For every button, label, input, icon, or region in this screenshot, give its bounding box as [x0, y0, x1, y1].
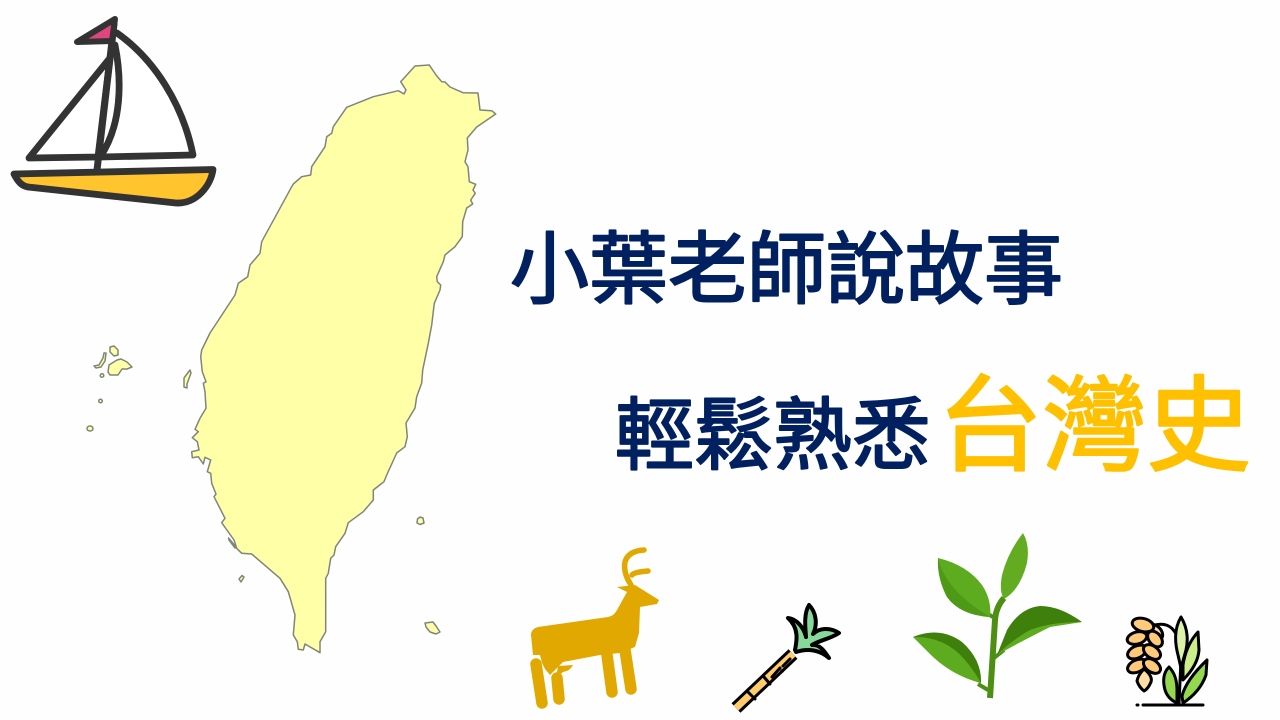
- plant leaves: [1176, 617, 1187, 668]
- deer tuft: [556, 665, 573, 678]
- subtitle: gold emphasis: 台灣史: [938, 341, 1251, 492]
- deer body: [531, 585, 659, 675]
- tea left leaf: [913, 633, 981, 683]
- sugarcane leaves: [788, 605, 839, 658]
- icon: sugarcane: [736, 605, 839, 708]
- deer antlers: [625, 550, 648, 585]
- tea side stems: [978, 614, 1004, 690]
- sugarcane stalk joints: [747, 668, 780, 699]
- map: Orchid Island: [425, 622, 440, 634]
- title: second line: [615, 341, 1251, 492]
- plant stem: [1155, 624, 1181, 703]
- map: Taiwan and outlying islands: [87, 65, 496, 653]
- map: Xiaoliuqiu and small islets: [228, 538, 244, 582]
- map: Penghu islands: [87, 346, 132, 431]
- map: main island: [192, 65, 496, 653]
- sugarcane stalk: [736, 654, 793, 708]
- icon: tea sprig: [913, 533, 1082, 698]
- icon: sailboat: [14, 19, 213, 203]
- tea right leaf: [997, 606, 1082, 655]
- map: Green Island: [417, 517, 424, 524]
- sailboat flag: [77, 19, 115, 42]
- deer legs: [536, 650, 631, 703]
- tea upper-left leaf: [938, 558, 990, 617]
- map: Waisanding sandbar: [184, 370, 191, 388]
- icon: rice and wheat: [1125, 616, 1207, 705]
- sailboat mast: [97, 24, 114, 170]
- sailboat sails: [29, 33, 193, 158]
- title: first line: 小葉老師說故事: [510, 205, 1063, 320]
- icon: deer: [531, 550, 659, 703]
- grain head: [1125, 616, 1166, 691]
- tea top leaf: [1001, 533, 1028, 599]
- sailboat hull: [14, 170, 213, 203]
- tea stem: [990, 598, 1004, 698]
- ground line: [1137, 704, 1203, 706]
- subtitle: navy words: 輕鬆熟悉: [615, 371, 931, 486]
